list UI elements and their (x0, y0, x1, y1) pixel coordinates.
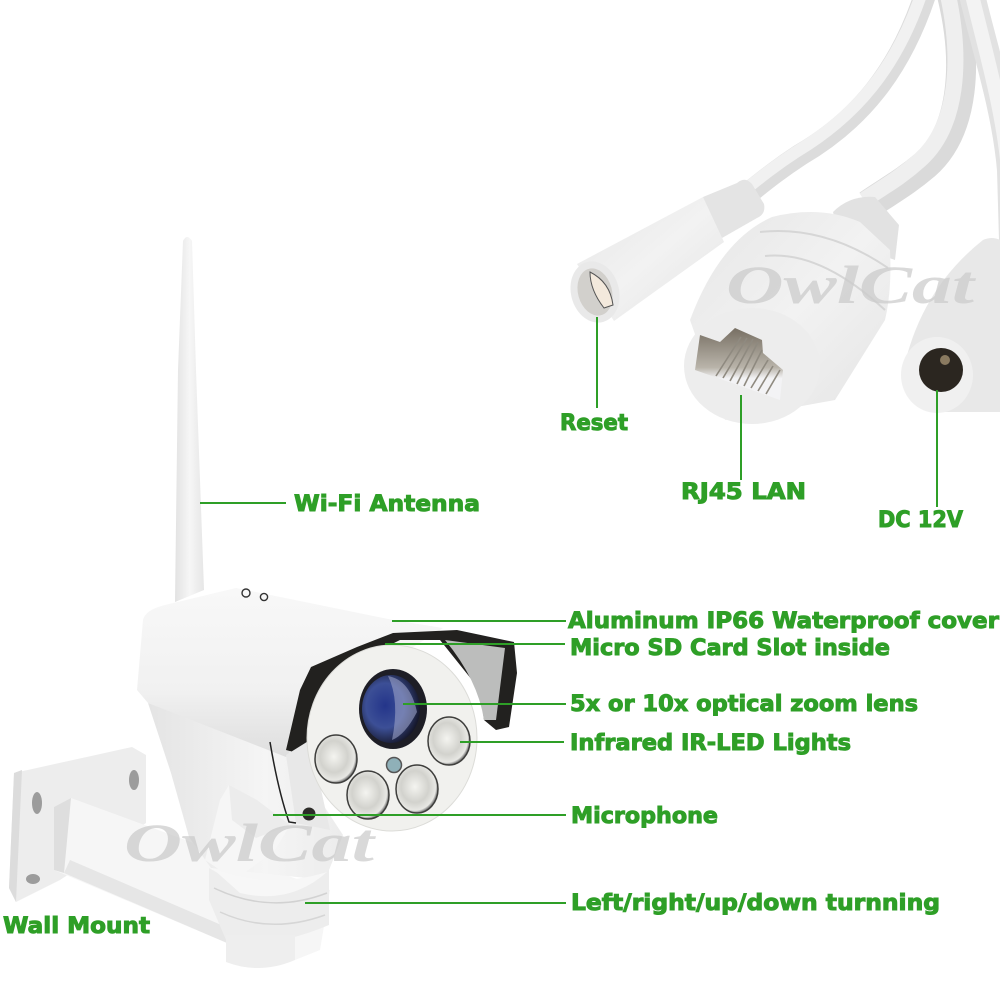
callout: Micro SD: Micro SD Card Slot inside (570, 636, 890, 661)
RJ45 pins (716, 337, 780, 394)
wall plate (9, 747, 146, 902)
watermark: bottom: OwlCat (124, 813, 377, 873)
IR LEDs (315, 717, 470, 819)
camera body (137, 588, 443, 757)
wall arm (54, 798, 330, 960)
callout: Microphone: Microphone (571, 804, 718, 829)
icon: Wi-Fi antenna (175, 237, 204, 602)
neck (148, 703, 343, 880)
callout: zoom lens: 5x or 10x optical zoom lens (570, 692, 918, 717)
camera assembly (9, 588, 517, 968)
cable: RJ45 (864, 0, 961, 205)
base (209, 868, 329, 968)
callout: IR LEDs: Infrared IR-LED Lights (570, 731, 851, 756)
cable: DC (972, 0, 1000, 240)
front disc (307, 645, 477, 831)
connector: reset plug (564, 180, 764, 328)
callout: RJ45 LAN (681, 395, 806, 505)
microphone (302, 808, 316, 820)
RJ45 jack opening (695, 328, 783, 400)
barrel ring (286, 740, 330, 830)
callout: Reset: Reset (560, 411, 628, 436)
connector: RJ45 plug (684, 197, 899, 424)
callout: RJ45 LAN: RJ45 LAN (681, 480, 806, 505)
callout: Reset (560, 317, 628, 436)
connector: DC plug (901, 238, 1000, 413)
callout: turning: Left/right/up/down turnning (571, 891, 940, 916)
watermark: top: OwlCat (726, 255, 977, 315)
cables and connectors (564, 0, 1000, 424)
light sensor (386, 758, 402, 772)
cable: reset (746, 0, 925, 192)
label: Wall Mount: Wall Mount (3, 914, 151, 939)
callout: Wi-Fi Antenna: Wi-Fi Antenna (294, 492, 480, 517)
callout: Aluminum cover: Aluminum IP66 Waterproof cover (568, 609, 999, 634)
callout: DC 12V: DC 12V (878, 508, 963, 533)
status marks (242, 589, 268, 601)
lens (359, 669, 427, 749)
hood (286, 630, 517, 755)
